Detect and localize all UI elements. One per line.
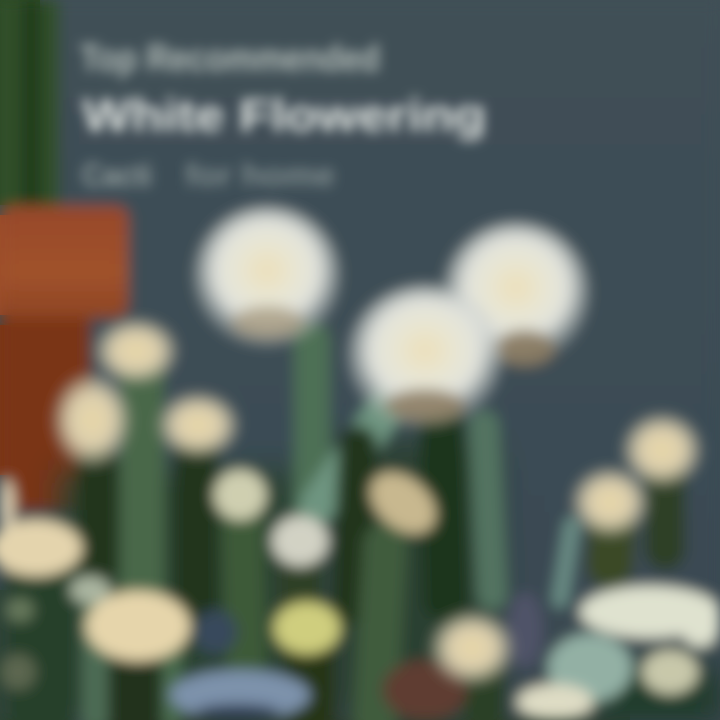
- cactus stems: [40, 340, 665, 720]
- heading text: [80, 38, 486, 193]
- lower pots: [170, 592, 632, 720]
- large white flower center: [349, 286, 501, 426]
- dark foliage mass: [0, 440, 720, 720]
- terracotta pot: [0, 206, 128, 510]
- heading text: Cacti: [82, 157, 152, 193]
- large white flower right: [444, 223, 588, 366]
- small cream flowers: [0, 320, 720, 720]
- heading text: for home: [185, 157, 335, 193]
- potted cactus top left: [0, 0, 60, 212]
- large white flower left: [195, 207, 339, 345]
- heading text: White Flowering: [82, 89, 486, 141]
- heading text: Top Recommended: [80, 38, 380, 80]
